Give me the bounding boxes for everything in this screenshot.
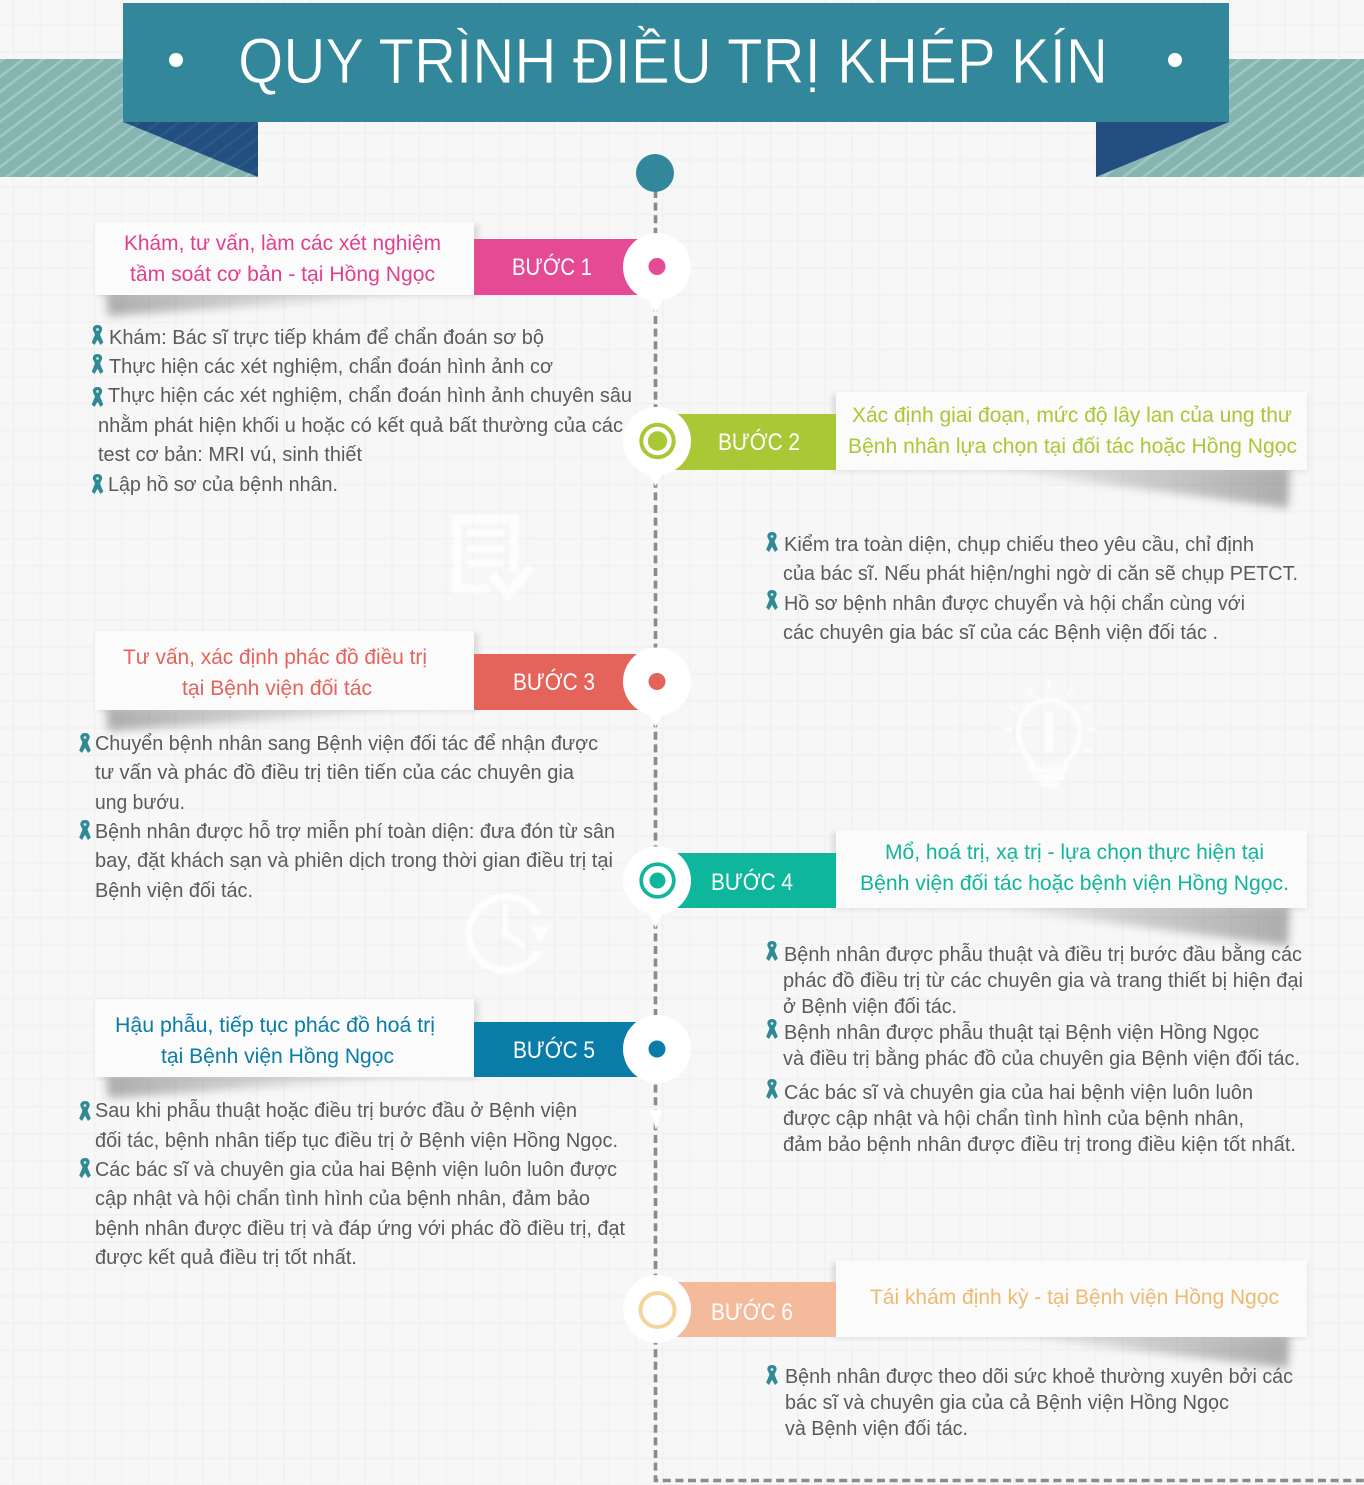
- node tail: [648, 298, 664, 313]
- step 4: [623, 830, 1307, 946]
- node tail: [648, 712, 664, 727]
- step 5 details: Các bác sĩ và chuyên gia của hai Bệnh viện luôn luôn được: [95, 1159, 617, 1181]
- caption: tại Bệnh viện đối tác: [182, 677, 372, 700]
- step 4 details: Bệnh nhân được phẫu thuật tại Bệnh viện Hồng Ngọc: [784, 1021, 1259, 1044]
- step 3 details: Bệnh nhân được hỗ trợ miễn phí toàn diện: đưa đón từ sân: [95, 820, 615, 843]
- step 5 details: Sau khi phẫu thuật hoặc điều trị bước đầu ở Bệnh viện: [95, 1099, 577, 1122]
- caption: Bệnh viện đối tác hoặc bệnh viện Hồng Ngọc.: [860, 872, 1289, 895]
- step 5: [95, 999, 691, 1130]
- shadow: [980, 468, 1290, 508]
- right ribbon band: [1229, 59, 1364, 177]
- box glow: [97, 224, 479, 296]
- caption: Tư vấn, xác định phác đồ điều trị: [123, 646, 427, 669]
- shadow: [1000, 1335, 1290, 1368]
- shadow: [980, 906, 1290, 946]
- timeline start node: [636, 154, 674, 192]
- left band end under banner: [123, 122, 258, 177]
- caption box: [836, 830, 1307, 908]
- caption: Tái khám định kỳ - tại Bệnh viện Hồng Ngọc: [870, 1286, 1279, 1309]
- node dot: [648, 258, 666, 275]
- shadow: [106, 293, 440, 316]
- node dot: [648, 673, 666, 690]
- caption: Mổ, hoá trị, xạ trị - lựa chọn thực hiện tại: [885, 841, 1264, 864]
- step label: BƯỚC 4: [711, 869, 793, 896]
- caption: Khám, tư vấn, làm các xét nghiệm: [124, 232, 441, 255]
- box glow: [832, 394, 1307, 471]
- caption: Xác định giai đoạn, mức độ lây lan của ung thư: [852, 404, 1292, 427]
- step label: BƯỚC 5: [513, 1037, 595, 1064]
- step 6: [623, 1260, 1307, 1368]
- step 1 details: Thực hiện các xét nghiệm, chẩn đoán hình ảnh chuyên sâu: [108, 385, 632, 407]
- step 3 details: Chuyển bệnh nhân sang Bệnh viện đối tác để nhận được: [95, 733, 598, 755]
- step 5 details: [79, 1099, 625, 1269]
- step 4 details: được cập nhật và hội chẩn tình hình của bệnh nhân,: [783, 1108, 1244, 1130]
- node tail: [648, 472, 664, 486]
- step label: BƯỚC 1: [512, 254, 592, 281]
- node dot: [648, 1040, 666, 1058]
- left banner fold: [123, 122, 258, 177]
- caption: Bệnh nhân lựa chọn tại đối tác hoặc Hồng Ngọc: [848, 435, 1297, 458]
- step 1: [95, 222, 691, 316]
- caption: [860, 841, 1289, 895]
- node: [623, 407, 691, 475]
- icon: clock (ghost): [469, 896, 550, 970]
- caption box: [836, 1260, 1307, 1337]
- caption box: [95, 631, 474, 710]
- left ribbon band: [0, 59, 124, 177]
- step 4 details: và điều trị bằng phác đồ của chuyên gia Bệnh viện đối tác.: [783, 1047, 1300, 1070]
- caption: [115, 1014, 435, 1068]
- step 4 details: [766, 941, 1303, 1156]
- step 6 details: và Bệnh viện đối tác.: [785, 1418, 968, 1440]
- caption: [848, 404, 1297, 458]
- step 2 details: các chuyên gia bác sĩ của các Bệnh viện đối tác .: [783, 622, 1218, 644]
- step 3 details: [79, 733, 615, 902]
- step 5 details: đối tác, bệnh nhân tiếp tục điều trị ở Bệnh viện Hồng Ngọc.: [95, 1130, 618, 1152]
- step 4 details: ở Bệnh viện đối tác.: [783, 996, 957, 1018]
- step bar: [670, 414, 836, 470]
- step 2 details: Kiểm tra toàn diện, chụp chiếu theo yêu cầu, chỉ định: [784, 534, 1254, 556]
- node ring: [640, 1293, 674, 1327]
- step 4 details: đảm bảo bệnh nhân được điều trị trong điều kiện tốt nhất.: [783, 1134, 1296, 1156]
- shadow: [106, 708, 440, 731]
- node: [623, 233, 691, 301]
- node dot: [648, 431, 667, 451]
- title: QUY TRÌNH ĐIỀU TRỊ KHÉP KÍN: [238, 25, 1108, 97]
- icon: light bulb (ghost): [1004, 680, 1096, 784]
- step 1 details: Khám: Bác sĩ trực tiếp khám để chẩn đoán sơ bộ: [109, 327, 544, 349]
- step 2: [623, 392, 1307, 508]
- step 1 details: Thực hiện các xét nghiệm, chẩn đoán hình ảnh cơ: [109, 356, 553, 378]
- caption box: [95, 999, 474, 1077]
- step 4 details: phác đồ điều trị từ các chuyên gia và trang thiết bị hiện đại: [783, 970, 1303, 992]
- caption: [123, 646, 427, 700]
- caption box: [836, 392, 1307, 470]
- banner dot right: [1168, 53, 1182, 67]
- step label: BƯỚC 6: [711, 1299, 793, 1326]
- step 2 details: [766, 532, 1298, 644]
- step 2 details: Hồ sơ bệnh nhân được chuyển và hội chẩn cùng với: [784, 593, 1245, 615]
- step label: BƯỚC 2: [718, 429, 800, 456]
- box glow: [832, 1262, 1307, 1338]
- step 1 details: Lập hồ sơ của bệnh nhân.: [108, 474, 338, 496]
- box glow: [97, 1001, 479, 1078]
- node ring: [641, 425, 674, 457]
- step label: BƯỚC 3: [513, 669, 595, 696]
- step 3 details: bay, đặt khách sạn và phiên dịch trong thời gian điều trị tại: [95, 850, 613, 872]
- step 5 details: cập nhật và hội chẩn tình hình của bệnh nhân, đảm bảo: [95, 1188, 590, 1210]
- caption box: [95, 222, 474, 295]
- step 2 details: của bác sĩ. Nếu phát hiện/nghi ngờ di căn sẽ chụp PETCT.: [783, 563, 1298, 585]
- caption: tại Bệnh viện Hồng Ngọc: [161, 1045, 394, 1068]
- step 5 details: được kết quả điều trị tốt nhất.: [95, 1247, 357, 1269]
- shadow: [106, 1075, 440, 1098]
- step 1 details: nhằm phát hiện khối u hoặc có kết quả bất thường của các: [98, 414, 623, 437]
- node: [623, 1275, 691, 1343]
- box glow: [832, 832, 1307, 909]
- title banner: [123, 3, 1229, 122]
- step bar: [474, 239, 644, 295]
- node: [623, 846, 691, 914]
- step 3 details: ung bướu.: [95, 792, 185, 814]
- node: [623, 648, 691, 716]
- step 6 details: [766, 1365, 1293, 1440]
- step 4 details: Bệnh nhân được phẫu thuật và điều trị bước đầu bằng các: [784, 943, 1302, 966]
- node dot: [650, 872, 666, 888]
- step bar: [474, 654, 644, 710]
- node: [623, 1015, 691, 1083]
- box glow: [97, 633, 479, 711]
- step 3: [95, 631, 691, 731]
- node ring: [641, 864, 674, 897]
- caption: tầm soát cơ bản - tại Hồng Ngọc: [130, 263, 435, 286]
- icon: document check (ghost): [457, 519, 531, 595]
- banner dot left: [169, 53, 183, 67]
- step 1 details: test cơ bản: MRI vú, sinh thiết: [98, 444, 362, 466]
- step bar: [474, 1022, 644, 1077]
- right band end under banner: [1096, 122, 1229, 177]
- step 5 details: bệnh nhân được điều trị và đáp ứng với phác đồ điều trị, đạt: [95, 1218, 625, 1240]
- timeline dashed line: [656, 190, 1364, 1480]
- caption: Hậu phẫu, tiếp tục phác đồ hoá trị: [115, 1014, 435, 1037]
- step 1 details: [92, 325, 632, 496]
- step 4 details: Các bác sĩ và chuyên gia của hai bệnh viện luôn luôn: [784, 1082, 1253, 1104]
- node pin tip: [650, 1110, 662, 1130]
- step 3 details: Bệnh viện đối tác.: [95, 880, 253, 902]
- step 6 details: Bệnh nhân được theo dõi sức khoẻ thường xuyên bởi các: [785, 1366, 1293, 1388]
- step 6 details: bác sĩ và chuyên gia của cả Bệnh viện Hồng Ngọc: [785, 1392, 1229, 1414]
- node tail: [648, 911, 664, 928]
- step bar: [670, 853, 836, 908]
- caption: [124, 232, 441, 286]
- right banner fold: [1096, 122, 1229, 177]
- step bar: [670, 1282, 836, 1337]
- step 3 details: tư vấn và phác đồ điều trị tiên tiến của các chuyên gia: [95, 762, 575, 784]
